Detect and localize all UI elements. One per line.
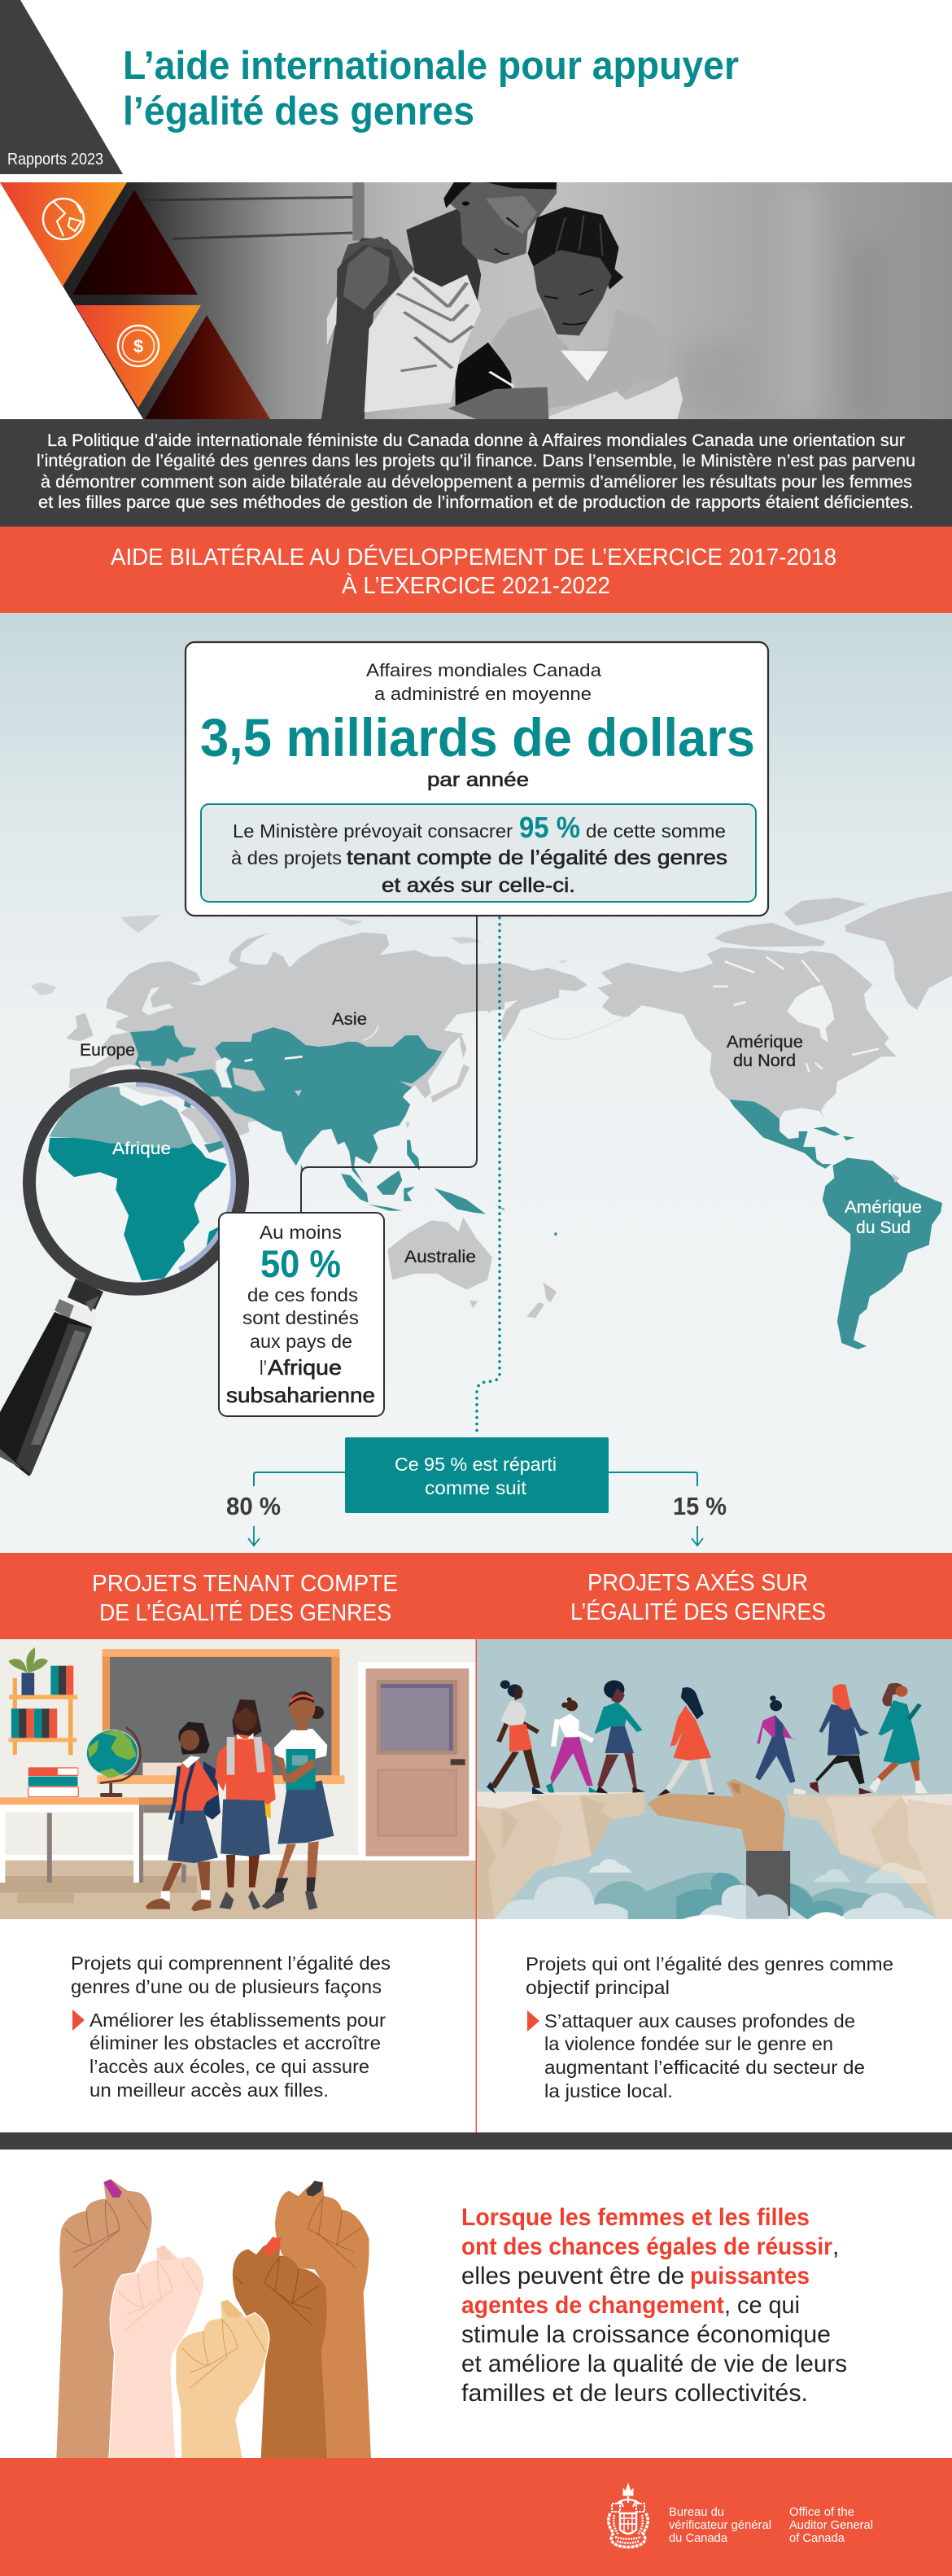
closing statement: puissantes xyxy=(690,2263,810,2290)
continent labels: Europe xyxy=(80,1041,135,1060)
callout: 50 percent to Sub-Saharan Africa: subsaharienne xyxy=(226,1383,375,1407)
magnifying glass ring xyxy=(29,1076,242,1289)
callout: 50 percent to Sub-Saharan Africa xyxy=(219,1213,384,1416)
illustration: women crossing a gap on a helping hand xyxy=(476,1639,952,1919)
inner box: 95 percent: de cette somme xyxy=(586,820,726,842)
woman in orange dress xyxy=(657,1687,714,1796)
illustration: classroom with three schoolgirls xyxy=(0,1639,476,1919)
closing statement xyxy=(461,2204,847,2407)
closing statement: ont des chances égales de réussir xyxy=(461,2233,832,2260)
right column text: la violence fondée sur le genre en xyxy=(544,2033,833,2054)
box: distribution of 95 percent xyxy=(345,1437,609,1513)
80 percent value: 80 % xyxy=(226,1492,281,1520)
closing statement: familles et de leurs collectivités. xyxy=(461,2380,808,2407)
section header: bilateral aid: AIDE BILATÉRALE AU DÉVELOPPEMENT DE L’EXERCICE 2017-2018 xyxy=(111,544,836,571)
fist 4 xyxy=(233,2237,327,2459)
girl in magenta top and overalls xyxy=(755,1695,806,1795)
closing statement: agentes de changement xyxy=(461,2292,724,2319)
left column text: l’accès aux écoles, ce qui assure xyxy=(90,2056,369,2077)
main callout box: Affaires mondiales Canada xyxy=(366,660,602,680)
magnifying glass handle xyxy=(0,1279,103,1476)
continent labels: Australie xyxy=(404,1248,476,1266)
orange triangle with dollar icon xyxy=(75,305,201,408)
section header: bilateral aid xyxy=(0,527,952,613)
footer text: English wordmark xyxy=(789,2505,873,2545)
right column text: Projets qui ont l’égalité des genres comme xyxy=(526,1953,893,1975)
footer band xyxy=(0,2458,952,2576)
inner box: 95 percent: 95 % xyxy=(519,811,580,844)
split connector lines xyxy=(254,1472,697,1486)
fist 5 xyxy=(275,2180,371,2459)
right column text: objectif principal xyxy=(526,1977,670,1998)
continent labels: du Nord xyxy=(733,1052,796,1070)
girl with book xyxy=(262,1691,334,1910)
footer text: French wordmark: Bureau du xyxy=(669,2505,724,2519)
left column text: genres d’une ou de plusieurs façons xyxy=(71,1976,382,1997)
girl with backpack xyxy=(146,1722,221,1911)
footer text: English wordmark: Office of the xyxy=(789,2505,854,2519)
vertical divider xyxy=(475,1639,477,2132)
arrow: to gender-focused projects xyxy=(692,1526,703,1546)
orange triangle with globe icon xyxy=(0,182,127,286)
woman in hijab and blue coat xyxy=(810,1684,872,1795)
teal priority region: Latin America xyxy=(554,1100,942,1349)
world map: Americas xyxy=(488,891,952,1349)
teal priority region: Asia xyxy=(130,1026,504,1214)
girl xyxy=(448,207,683,419)
chalkboard xyxy=(97,1649,344,1784)
girl with sweater xyxy=(215,1699,276,1910)
bullet xyxy=(527,2010,539,2031)
left column text: Projets qui comprennent l’égalité des xyxy=(71,1953,391,1974)
fist 2 xyxy=(109,2245,204,2459)
box: distribution of 95 percent: comme suit xyxy=(425,1477,527,1498)
main callout box: par année xyxy=(427,769,529,791)
closing statement: et améliore la qualité de vie de leurs xyxy=(461,2351,847,2377)
header triangle xyxy=(0,0,123,174)
woman in teal top and shorts xyxy=(595,1680,645,1793)
illustration: five raised fists xyxy=(56,2179,371,2459)
closing statement: , ce qui xyxy=(724,2292,800,2319)
dotted connector xyxy=(477,905,500,1431)
right column text: S’attaquer aux causes profondes de xyxy=(544,2010,855,2031)
woman in teal dress xyxy=(869,1683,928,1793)
stacked books xyxy=(28,1767,78,1797)
inner box: 95 percent: Le Ministère prévoyait consacrer xyxy=(233,820,513,842)
closing statement: stimule la croissance économique xyxy=(461,2321,831,2348)
section header: two project types: L’ÉGALITÉ DES GENRES xyxy=(570,1599,826,1625)
left column text: éliminer les obstacles et accroître xyxy=(90,2032,381,2053)
woman in orange skirt xyxy=(487,1680,544,1794)
photo banner: woman and girl writing xyxy=(0,182,952,419)
callout: 50 percent to Sub-Saharan Africa: sont destinés xyxy=(242,1307,359,1328)
footer text: French wordmark xyxy=(669,2505,771,2545)
callout: 50 percent to Sub-Saharan Africa: de ces fonds xyxy=(247,1284,358,1305)
dark red triangle xyxy=(145,315,270,419)
callout connector line xyxy=(301,916,477,1213)
hand xyxy=(648,1779,790,1919)
section header: two project types: DE L’ÉGALITÉ DES GENRES xyxy=(99,1599,391,1626)
continent labels: Asie xyxy=(332,1010,367,1029)
section header: bilateral aid: À L’EXERCICE 2021-2022 xyxy=(342,572,610,599)
right column text: la justice local. xyxy=(544,2080,673,2101)
callout: 50 percent to Sub-Saharan Africa: Afrique xyxy=(268,1355,342,1380)
bullet xyxy=(72,2010,85,2031)
map panel background xyxy=(0,613,952,1553)
left column text xyxy=(71,1953,391,2101)
footer text: English wordmark: of Canada xyxy=(789,2531,845,2545)
wall details xyxy=(140,197,352,238)
Afrique label: Afrique xyxy=(112,1139,171,1158)
report label: Rapports 2023 xyxy=(7,151,103,168)
footer text: French wordmark: du Canada xyxy=(669,2531,728,2545)
title: L’aide internationale pour appuyer xyxy=(123,44,739,88)
left column text: Améliorer les établissements pour xyxy=(90,2010,386,2031)
callout: 50 percent to Sub-Saharan Africa: Au moins xyxy=(260,1222,342,1243)
closing statement: Lorsque les femmes et les filles xyxy=(461,2204,810,2231)
box: distribution of 95 percent: Ce 95 % est réparti xyxy=(395,1454,557,1475)
closing statement: , xyxy=(832,2233,839,2260)
section header: two project types xyxy=(0,1553,952,1639)
section header: two project types: PROJETS TENANT COMPTE xyxy=(92,1571,398,1597)
table xyxy=(0,1797,197,1903)
continent labels: du Sud xyxy=(856,1218,911,1237)
title xyxy=(123,44,739,133)
title: l’égalité des genres xyxy=(123,90,474,133)
continent labels: Amérique xyxy=(845,1198,922,1217)
right column text: augmentant l’efficacité du secteur de xyxy=(544,2057,865,2078)
intro band xyxy=(0,419,952,527)
fist 3 xyxy=(176,2300,269,2459)
section header: two project types: PROJETS AXÉS SUR xyxy=(587,1569,808,1596)
inner box: 95 percent xyxy=(201,804,756,902)
door xyxy=(358,1662,476,1861)
left column text: un meilleur accès aux filles. xyxy=(90,2080,329,2101)
big number: 3,5 milliards de dollars xyxy=(200,707,755,768)
right cliff xyxy=(786,1794,952,1919)
girl in magenta trousers xyxy=(546,1697,599,1792)
callout: 50 percent to Sub-Saharan Africa: l’ xyxy=(260,1357,267,1380)
intro band: l’intégration de l’égalité des genres dans les projets qu’il finance. Dans l’ensemble, le Ministère n’est pas parvenu xyxy=(37,451,915,470)
intro band: La Politique d’aide internationale féministe du Canada donne à Affaires mondiales Canada une orientation sur xyxy=(47,431,905,450)
main callout box xyxy=(186,642,768,916)
continent labels xyxy=(80,1010,922,1266)
dark triangle xyxy=(72,190,198,295)
intro band: à démontrer comment son aide bilatérale au développement a permis d’améliorer les résultats pour les femmes xyxy=(41,472,912,492)
continent labels: Amérique xyxy=(727,1033,803,1052)
clouds xyxy=(485,1859,937,1919)
globe xyxy=(86,1727,140,1797)
footer text: French wordmark: vérificateur général xyxy=(669,2518,771,2532)
closing statement: elles peuvent être de xyxy=(461,2263,684,2290)
callout: 50 percent to Sub-Saharan Africa: aux pays de xyxy=(250,1331,352,1352)
dark divider band xyxy=(0,2132,952,2150)
arrow: to gender-inclusive projects xyxy=(248,1526,260,1546)
15 percent value: 15 % xyxy=(673,1492,727,1520)
magnified Africa xyxy=(48,1082,236,1281)
inner box: 95 percent: tenant compte de l’égalité des genres xyxy=(347,846,727,869)
intro band: et les filles parce que ses méthodes de gestion de l’information et de production de rapports étaient déficientes. xyxy=(38,492,914,512)
inner box: 95 percent: à des projets xyxy=(231,847,342,868)
world map: Eurasia and Oceania xyxy=(31,915,504,1308)
white wedge xyxy=(0,182,143,419)
logo: coat of arms xyxy=(609,2484,648,2548)
shelves with books and plant xyxy=(8,1647,77,1755)
Australia xyxy=(387,1218,492,1308)
fist 1 xyxy=(56,2179,152,2459)
callout: 50 percent to Sub-Saharan Africa: 50 % xyxy=(260,1242,341,1285)
footer text: English wordmark: Auditor General xyxy=(789,2518,873,2532)
woman's body xyxy=(321,182,557,419)
right column text xyxy=(526,1953,893,2101)
left cliff xyxy=(476,1791,644,1919)
inner box: 95 percent: et axés sur celle-ci. xyxy=(382,874,575,897)
main callout box: a administré en moyenne xyxy=(374,684,592,704)
orange triangle with dollar icon: $ xyxy=(133,336,143,356)
